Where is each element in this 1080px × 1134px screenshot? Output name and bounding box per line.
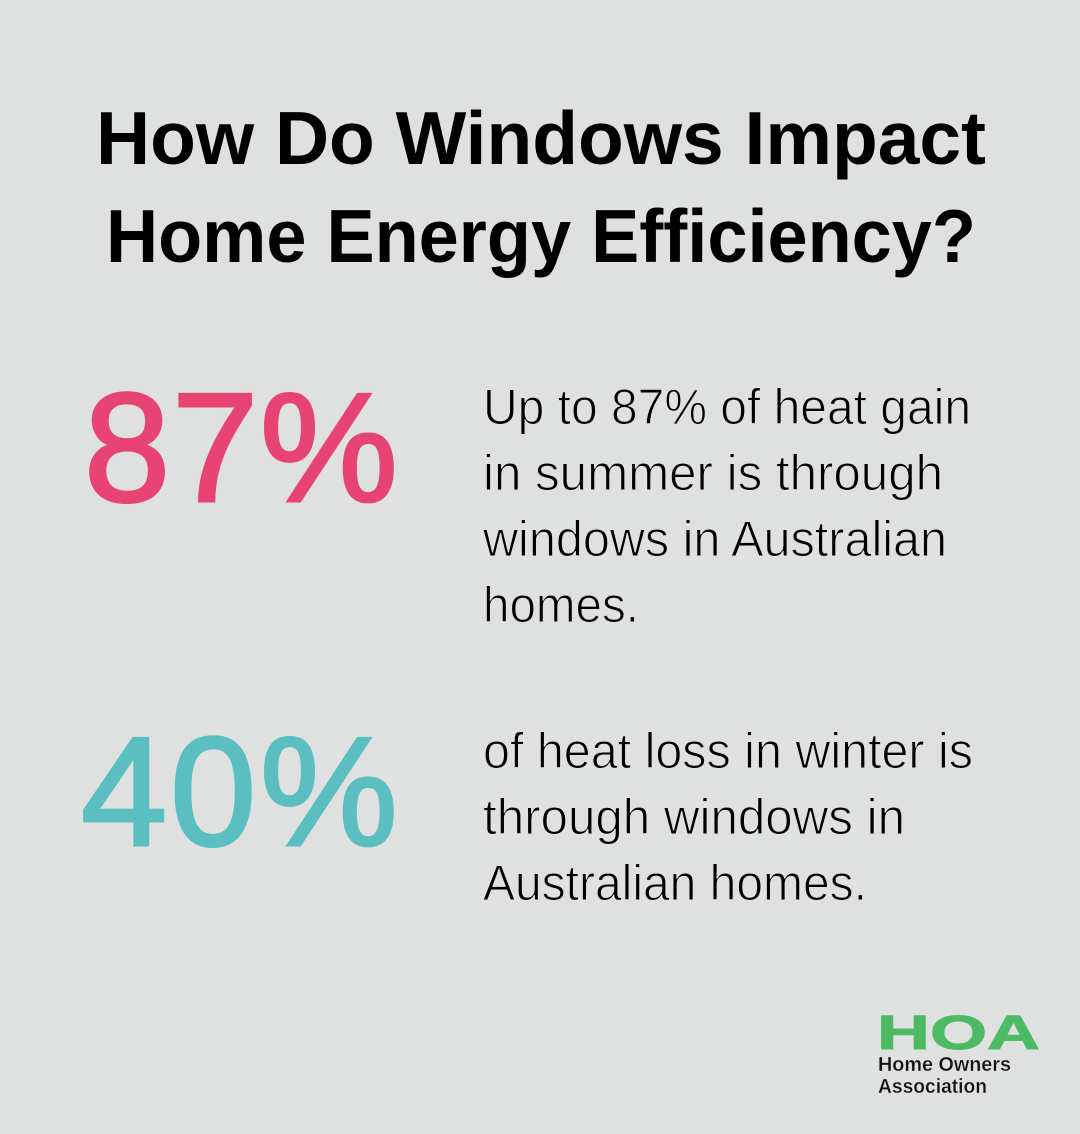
title: Home Energy Efficiency? bbox=[106, 194, 976, 278]
logo: HOA Home Owners Association bbox=[877, 1007, 1040, 1098]
description: 40% heat loss: Australian homes. bbox=[483, 855, 867, 911]
title: How Do Windows Impact bbox=[96, 96, 986, 180]
description: 40% heat loss: of heat loss in winter is bbox=[483, 723, 973, 779]
stat: 40%: 40% bbox=[81, 705, 398, 878]
description: 87% heat gain: in summer is through bbox=[483, 445, 943, 501]
logo: HOA Home Owners Association: Home Owners bbox=[878, 1054, 1011, 1076]
description: 40% heat loss: through windows in bbox=[483, 789, 905, 845]
title bbox=[96, 96, 986, 278]
logo: HOA Home Owners Association: Association bbox=[878, 1076, 987, 1098]
description: 87% heat gain bbox=[482, 379, 971, 633]
description: 40% heat loss bbox=[483, 723, 973, 911]
description: 87% heat gain: homes. bbox=[483, 577, 639, 633]
stat: 87%: 87% bbox=[84, 361, 398, 534]
description: 87% heat gain: Up to 87% of heat gain bbox=[483, 379, 971, 435]
description: 87% heat gain: windows in Australian bbox=[482, 511, 947, 567]
logo: HOA Home Owners Association: HOA bbox=[877, 1007, 1040, 1060]
